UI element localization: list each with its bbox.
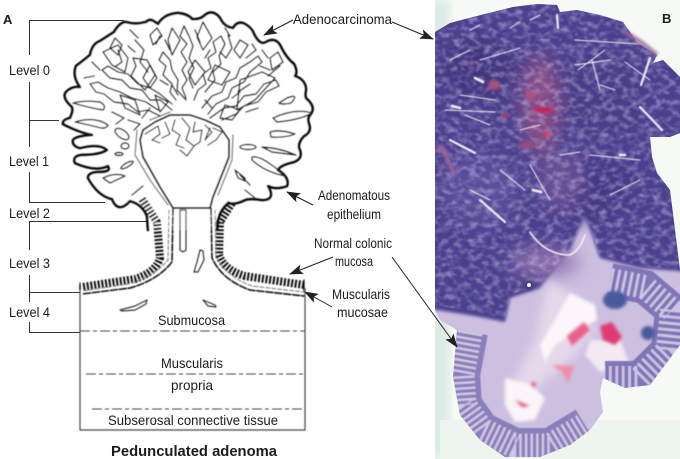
stalk and submucosa vessels xyxy=(120,210,216,311)
white gland lumen xyxy=(527,283,531,287)
panel B: histology photograph xyxy=(425,0,680,459)
level labels xyxy=(9,62,50,320)
photo background xyxy=(452,0,680,420)
crypt outer walls xyxy=(80,280,304,291)
muscularis mucosae lines xyxy=(82,208,304,296)
callout: Adenocarcinoma xyxy=(264,11,433,39)
stained vessels xyxy=(488,80,622,407)
dark blue nodules xyxy=(512,280,655,340)
callout: Normal colonic mucosa: mucosa xyxy=(335,253,373,269)
level labels: Level 0 xyxy=(9,62,50,78)
pale stroma xyxy=(514,276,595,390)
layer labels: Muscularis xyxy=(161,355,223,371)
heart-shaped stalk core xyxy=(140,115,229,208)
layer labels: Submucosa xyxy=(158,312,225,328)
level labels: Level 4 xyxy=(9,304,50,320)
normal mucosa gland band xyxy=(462,280,672,446)
callout: Normal colonic mucosa: Normal colonic xyxy=(314,235,392,251)
callout: Adenomatous epithelium: epithelium xyxy=(327,206,381,222)
arch glands above heart notch xyxy=(145,118,222,156)
level labels: Level 3 xyxy=(9,255,50,271)
level labels: Level 2 xyxy=(9,205,50,221)
layer labels: propria xyxy=(171,377,213,393)
polyp outer outline xyxy=(63,13,313,230)
callout: Adenocarcinoma: Adenocarcinoma xyxy=(293,11,392,27)
white clefts and gland lumens xyxy=(445,15,662,255)
polyp illustration xyxy=(63,13,313,311)
lobe cysts xyxy=(73,96,312,198)
tissue base xyxy=(425,0,680,459)
layer labels: Subserosal connective tissue xyxy=(108,412,278,428)
callout: Muscularis mucosae: mucosae xyxy=(337,304,388,320)
colour regions of adenomatous tissue xyxy=(443,42,618,286)
panel A: pedunculated adenoma diagram xyxy=(3,12,313,459)
callout: Normal colonic mucosa xyxy=(290,235,457,347)
panel label A: A xyxy=(3,12,13,27)
level labels: Level 1 xyxy=(9,153,49,169)
neck dashed line xyxy=(173,207,210,209)
stalk crypts xyxy=(82,199,160,287)
level brackets xyxy=(30,20,148,332)
pink tissue rim xyxy=(435,30,657,175)
gland mottling texture on upper tissue xyxy=(435,0,680,330)
panel label B: B xyxy=(662,11,671,26)
tissue layers box xyxy=(80,285,305,430)
layer labels xyxy=(108,312,278,428)
callout: Muscularis mucosae: Muscularis xyxy=(332,286,390,302)
callout: Muscularis mucosae xyxy=(305,286,390,320)
callout: Adenomatous epithelium: Adenomatous xyxy=(318,187,390,203)
callout: Adenomatous epithelium xyxy=(287,187,390,222)
interior glands xyxy=(84,22,283,130)
dark adenomatous region xyxy=(425,0,680,322)
